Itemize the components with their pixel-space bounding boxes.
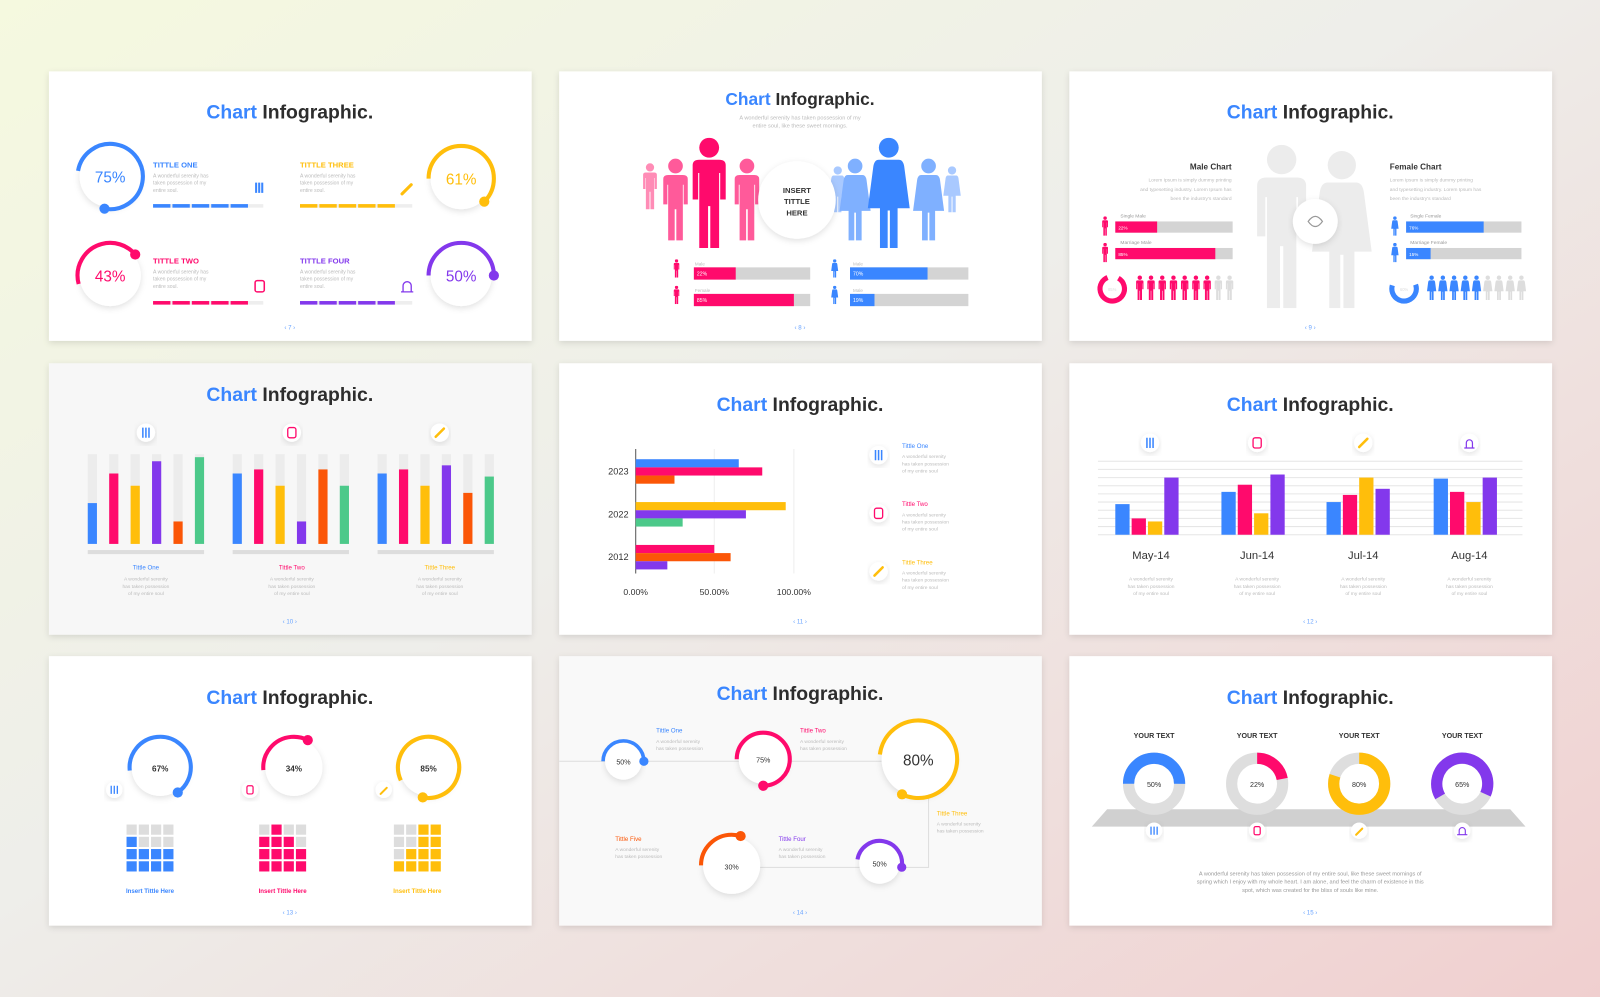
text block: tittle three: taken possession of my (300, 181, 354, 187)
legend items: of my entire soul (902, 527, 938, 533)
bar group one (88, 454, 204, 597)
connector lines (559, 761, 929, 867)
grid blue (127, 825, 173, 871)
female bars: 76% (1409, 226, 1418, 231)
gauge 43%: 43% (95, 269, 126, 286)
bar group one: of my entire soul (128, 591, 164, 597)
female bars: Marriage Female (1410, 240, 1447, 246)
female bars: Single Female (1410, 213, 1442, 219)
column descriptions: A wonderful serenity (1129, 577, 1174, 583)
ring 85%: 85% (420, 764, 437, 773)
page number: ‹ 14 › (793, 909, 807, 916)
bars blue: 19% (853, 298, 864, 304)
gauge 43% (70, 236, 150, 316)
female chart text: and typesetting industry. Lorem Ipsum has (1390, 187, 1482, 193)
grid labels: Insert Tittle Here (259, 888, 307, 895)
ring 85% (376, 727, 469, 808)
column chart: Aug-14 (1451, 550, 1487, 562)
legend items: has taken possession (902, 520, 949, 526)
bars pink: Male (695, 261, 705, 266)
column chart: May-14 (1132, 550, 1170, 562)
column descriptions: has taken possession (1446, 584, 1493, 590)
bars pink (674, 259, 810, 306)
bars blue: Male (853, 261, 863, 266)
text block: tittle two: taken possession of my (153, 277, 207, 283)
label: title five: A wonderful serenity (615, 847, 660, 853)
gauge 61%: 61% (446, 172, 477, 189)
ring 75% pink: 75% (756, 756, 771, 764)
donut 65% (1427, 749, 1497, 819)
text block: tittle three: entire soul. (300, 188, 325, 194)
panel: slide 14 ring timeline (559, 656, 1042, 926)
text block: tittle one: taken possession of my (153, 181, 207, 187)
donut 50% (1129, 758, 1180, 809)
panel: slide 10 vertical bars (49, 363, 532, 635)
icons (137, 423, 449, 442)
column descriptions: has taken possession (1128, 584, 1175, 590)
label: title five: has taken possession (615, 854, 662, 860)
label: title one: A wonderful serenity (656, 739, 701, 745)
legend items: of my entire soul (902, 585, 938, 591)
ring 80% yellow: 80% (903, 752, 934, 769)
male chart text: and typesetting industry. Lorem Ipsum has (1140, 187, 1232, 193)
panel: slide 9 male female chart (1069, 71, 1552, 341)
legend items: Tittle Two (902, 501, 928, 508)
ring 75% pink (737, 733, 790, 791)
text block: tittle four: TITTLE FOUR (300, 256, 350, 265)
label: title two (800, 728, 847, 752)
grid yellow (394, 825, 441, 871)
description: A wonderful serenity has taken possession of my entire soul, like these sweet mornings of (1199, 872, 1422, 878)
title: Chart Infographic. (206, 687, 373, 709)
ring 80% yellow (875, 716, 962, 802)
bars pink: 22% (697, 272, 708, 278)
panel: slide 11 horizontal bars (559, 363, 1042, 635)
male donut and people: 85% (1108, 287, 1117, 292)
grid labels: Insert Tittle Here (126, 888, 175, 895)
label: title two: Tittle Two (800, 728, 826, 735)
page number: ‹ 8 › (795, 325, 805, 332)
donut 80%: 80% (1352, 781, 1367, 789)
title: Chart Infographic. (1227, 394, 1394, 416)
female chart text: been the industry's standard (1390, 196, 1451, 202)
label: title three: has taken possession (937, 829, 984, 835)
label: title one: has taken possession (656, 746, 703, 752)
male chart text: been the industry's standard (1171, 196, 1232, 202)
legend items: Tittle One (902, 443, 929, 450)
male chart text: Male Chart (1190, 162, 1232, 171)
bar group one: A wonderful serenity (124, 577, 168, 583)
bar group two: has taken possession (268, 584, 316, 590)
male bars (1102, 213, 1233, 262)
column descriptions: A wonderful serenity (1235, 577, 1280, 583)
horizontal bar chart: 2023 (608, 467, 629, 477)
ring 67% (106, 734, 194, 801)
ring 67%: 67% (152, 764, 169, 773)
text block: tittle three: A wonderful serenity has (300, 174, 356, 180)
female bars: 15% (1409, 252, 1418, 257)
bar group three: of my entire soul (422, 591, 458, 597)
text block: tittle three (300, 160, 412, 208)
page number: ‹ 9 › (1305, 325, 1316, 332)
horizontal bar chart: 0.00% (623, 587, 648, 597)
ring 50% purple (854, 837, 906, 889)
donut labels (1134, 732, 1483, 740)
label: title three (937, 810, 984, 835)
male chart text (1140, 162, 1232, 202)
label: title one: Tittle One (656, 728, 683, 735)
donut labels: YOUR TEXT (1339, 732, 1380, 740)
grid labels (126, 888, 442, 895)
horizontal bar chart (608, 449, 811, 597)
donut 22% (1232, 758, 1283, 809)
bar group three: Tittle Three (425, 564, 456, 571)
column descriptions: of my entire soul (1345, 591, 1381, 597)
female chart text (1390, 162, 1482, 202)
description: spring which I enjoy with my whole heart. I am alone, and feel the charm of existence in this (1197, 880, 1424, 886)
label: title three: Tittle Three (937, 810, 968, 817)
column chart: Jun-14 (1240, 550, 1274, 562)
ring 50% blue: 50% (616, 758, 631, 766)
bar group one: has taken possession (122, 584, 170, 590)
page number: ‹ 7 › (284, 325, 295, 332)
panel: slide 12 column chart (1069, 363, 1552, 635)
column descriptions: of my entire soul (1239, 591, 1275, 597)
text block: tittle one: A wonderful serenity has (153, 174, 209, 180)
text block: tittle two: TITTLE TWO (153, 256, 199, 265)
legend items: A wonderful serenity (902, 454, 946, 460)
column chart (1098, 461, 1522, 562)
label: title five (615, 836, 662, 860)
title: Chart Infographic. (717, 394, 883, 416)
legend items: has taken possession (902, 578, 949, 584)
bar group two (233, 454, 349, 597)
text block: tittle four (300, 256, 413, 305)
bar group three: A wonderful serenity (418, 577, 462, 583)
text block: tittle one: TITTLE ONE (153, 160, 198, 169)
bars blue: Male (853, 288, 863, 293)
column chart: Jul-14 (1348, 550, 1379, 562)
title: Chart Infographic. (717, 683, 883, 705)
gauge 75% (72, 139, 148, 214)
title: Chart Infographic. (725, 89, 875, 109)
male bars: Single Male (1120, 213, 1146, 219)
label: title four: has taken possession (779, 854, 826, 860)
label: title four: Tittle Four (779, 836, 806, 843)
bar group two: of my entire soul (274, 591, 310, 597)
bar group three: has taken possession (416, 584, 464, 590)
column descriptions: has taken possession (1234, 584, 1281, 590)
column descriptions: A wonderful serenity (1447, 577, 1492, 583)
platform (1092, 809, 1526, 827)
legend items: A wonderful serenity (902, 512, 946, 518)
horizontal bar chart: 2012 (608, 552, 629, 562)
label: title five: Tittle Five (615, 836, 642, 843)
gauge 50%: 50% (446, 269, 477, 286)
donut 65%: 65% (1455, 781, 1470, 789)
female chart text: Female Chart (1390, 162, 1442, 171)
grid labels: Insert Tittle Here (393, 888, 442, 895)
bars blue (831, 259, 968, 306)
text block: tittle two (153, 256, 264, 305)
column descriptions: A wonderful serenity (1341, 577, 1386, 583)
subtitle: A wonderful serenity has taken possession of my (739, 115, 861, 121)
label: title four (779, 836, 826, 860)
text block: tittle two: entire soul. (153, 284, 178, 290)
gauge 50% (429, 243, 499, 308)
description: spot, which was created for the bliss of souls like mine. (1242, 888, 1379, 894)
subtitle: entire soul, like these sweet mornings. (752, 124, 848, 130)
column descriptions: of my entire soul (1133, 591, 1169, 597)
legend items: of my entire soul (902, 468, 938, 474)
donut labels: YOUR TEXT (1237, 732, 1278, 740)
subtitle (739, 115, 861, 130)
donut 22%: 22% (1250, 781, 1265, 789)
horizontal bar chart: 100.00% (777, 587, 811, 597)
ring 50% purple: 50% (872, 860, 887, 868)
male bars: Marriage Male (1120, 240, 1152, 246)
grid pink (259, 825, 306, 871)
female chart text: Lorem Ipsum is simply dummy printing (1390, 178, 1473, 184)
label: title two: A wonderful serenity (800, 739, 844, 745)
donut 50%: 50% (1147, 781, 1162, 789)
bars pink: Female (695, 288, 711, 293)
gauge 61% (429, 146, 494, 211)
bar group three (378, 454, 494, 597)
donut labels: YOUR TEXT (1134, 732, 1175, 740)
text block: tittle one (153, 160, 263, 208)
gauge 75%: 75% (95, 170, 126, 187)
male bars: 22% (1118, 226, 1128, 231)
bar group one: Tittle One (133, 564, 160, 571)
panel: slide 15 donuts platform (1069, 656, 1552, 926)
ring 34% (242, 734, 327, 801)
page number: ‹ 13 › (283, 909, 297, 916)
center circle (758, 161, 836, 239)
column descriptions (1128, 577, 1493, 597)
female donut and people (1388, 273, 1526, 304)
center circle: INSERT (783, 186, 811, 195)
icons (1146, 822, 1470, 839)
title: Chart Infographic. (1227, 101, 1394, 123)
column descriptions: has taken possession (1340, 584, 1387, 590)
label: title four: A wonderful serenity (779, 847, 823, 853)
center circle: HERE (786, 208, 808, 217)
label: title three: A wonderful serenity (937, 822, 981, 828)
title: Chart Infographic. (206, 101, 373, 123)
ring 30% orange: 30% (725, 863, 739, 871)
donut 80% (1334, 758, 1385, 809)
legend items: has taken possession (902, 461, 949, 467)
title: Chart Infographic. (1227, 687, 1394, 709)
legend items: Tittle Three (902, 559, 933, 566)
ring 50% blue (603, 741, 648, 782)
donut labels: YOUR TEXT (1442, 732, 1483, 740)
ring 30% orange (701, 831, 762, 896)
title: Chart Infographic. (206, 384, 373, 406)
male donut and people (1096, 272, 1233, 306)
bar group two: A wonderful serenity (270, 577, 314, 583)
page number: ‹ 11 › (793, 619, 807, 626)
female bars (1391, 213, 1521, 262)
panel: slide 7 gauges (49, 71, 532, 341)
silhouettes (1257, 145, 1372, 308)
column descriptions: of my entire soul (1452, 591, 1487, 597)
female donut and people: 60% (1400, 287, 1409, 292)
bar group two: Tittle Two (279, 564, 305, 571)
page number: ‹ 10 › (283, 619, 297, 626)
text block: tittle four: entire soul. (300, 284, 325, 290)
bars blue: 70% (853, 272, 864, 278)
blue women group (829, 138, 961, 248)
horizontal bar chart: 50.00% (700, 587, 729, 597)
ring 34%: 34% (286, 764, 303, 773)
bars pink: 85% (697, 298, 708, 304)
text block: tittle one: entire soul. (153, 188, 178, 194)
legend items: A wonderful serenity (902, 571, 946, 577)
text block: tittle four: taken possession of my (300, 277, 354, 283)
center circle: TITTLE (784, 197, 810, 206)
page number: ‹ 12 › (1303, 619, 1317, 626)
page number: ‹ 15 › (1303, 909, 1317, 916)
label: title one (656, 728, 703, 752)
male bars: 85% (1118, 252, 1128, 257)
legend items (869, 443, 949, 591)
text block: tittle four: A wonderful serenity has (300, 269, 356, 275)
horizontal bar chart: 2022 (608, 509, 629, 519)
label: title two: has taken possession (800, 746, 847, 752)
description (1197, 872, 1424, 894)
text block: tittle three: TITTLE THREE (300, 160, 354, 169)
icons (1141, 434, 1479, 452)
male chart text: Lorem Ipsum is simply dummy printing (1148, 178, 1232, 184)
panel: slide 8 people (559, 71, 1042, 341)
pink men group (643, 138, 759, 248)
panel: slide 13 rings and grids (49, 656, 532, 926)
text block: tittle two: A wonderful serenity has (153, 269, 209, 275)
